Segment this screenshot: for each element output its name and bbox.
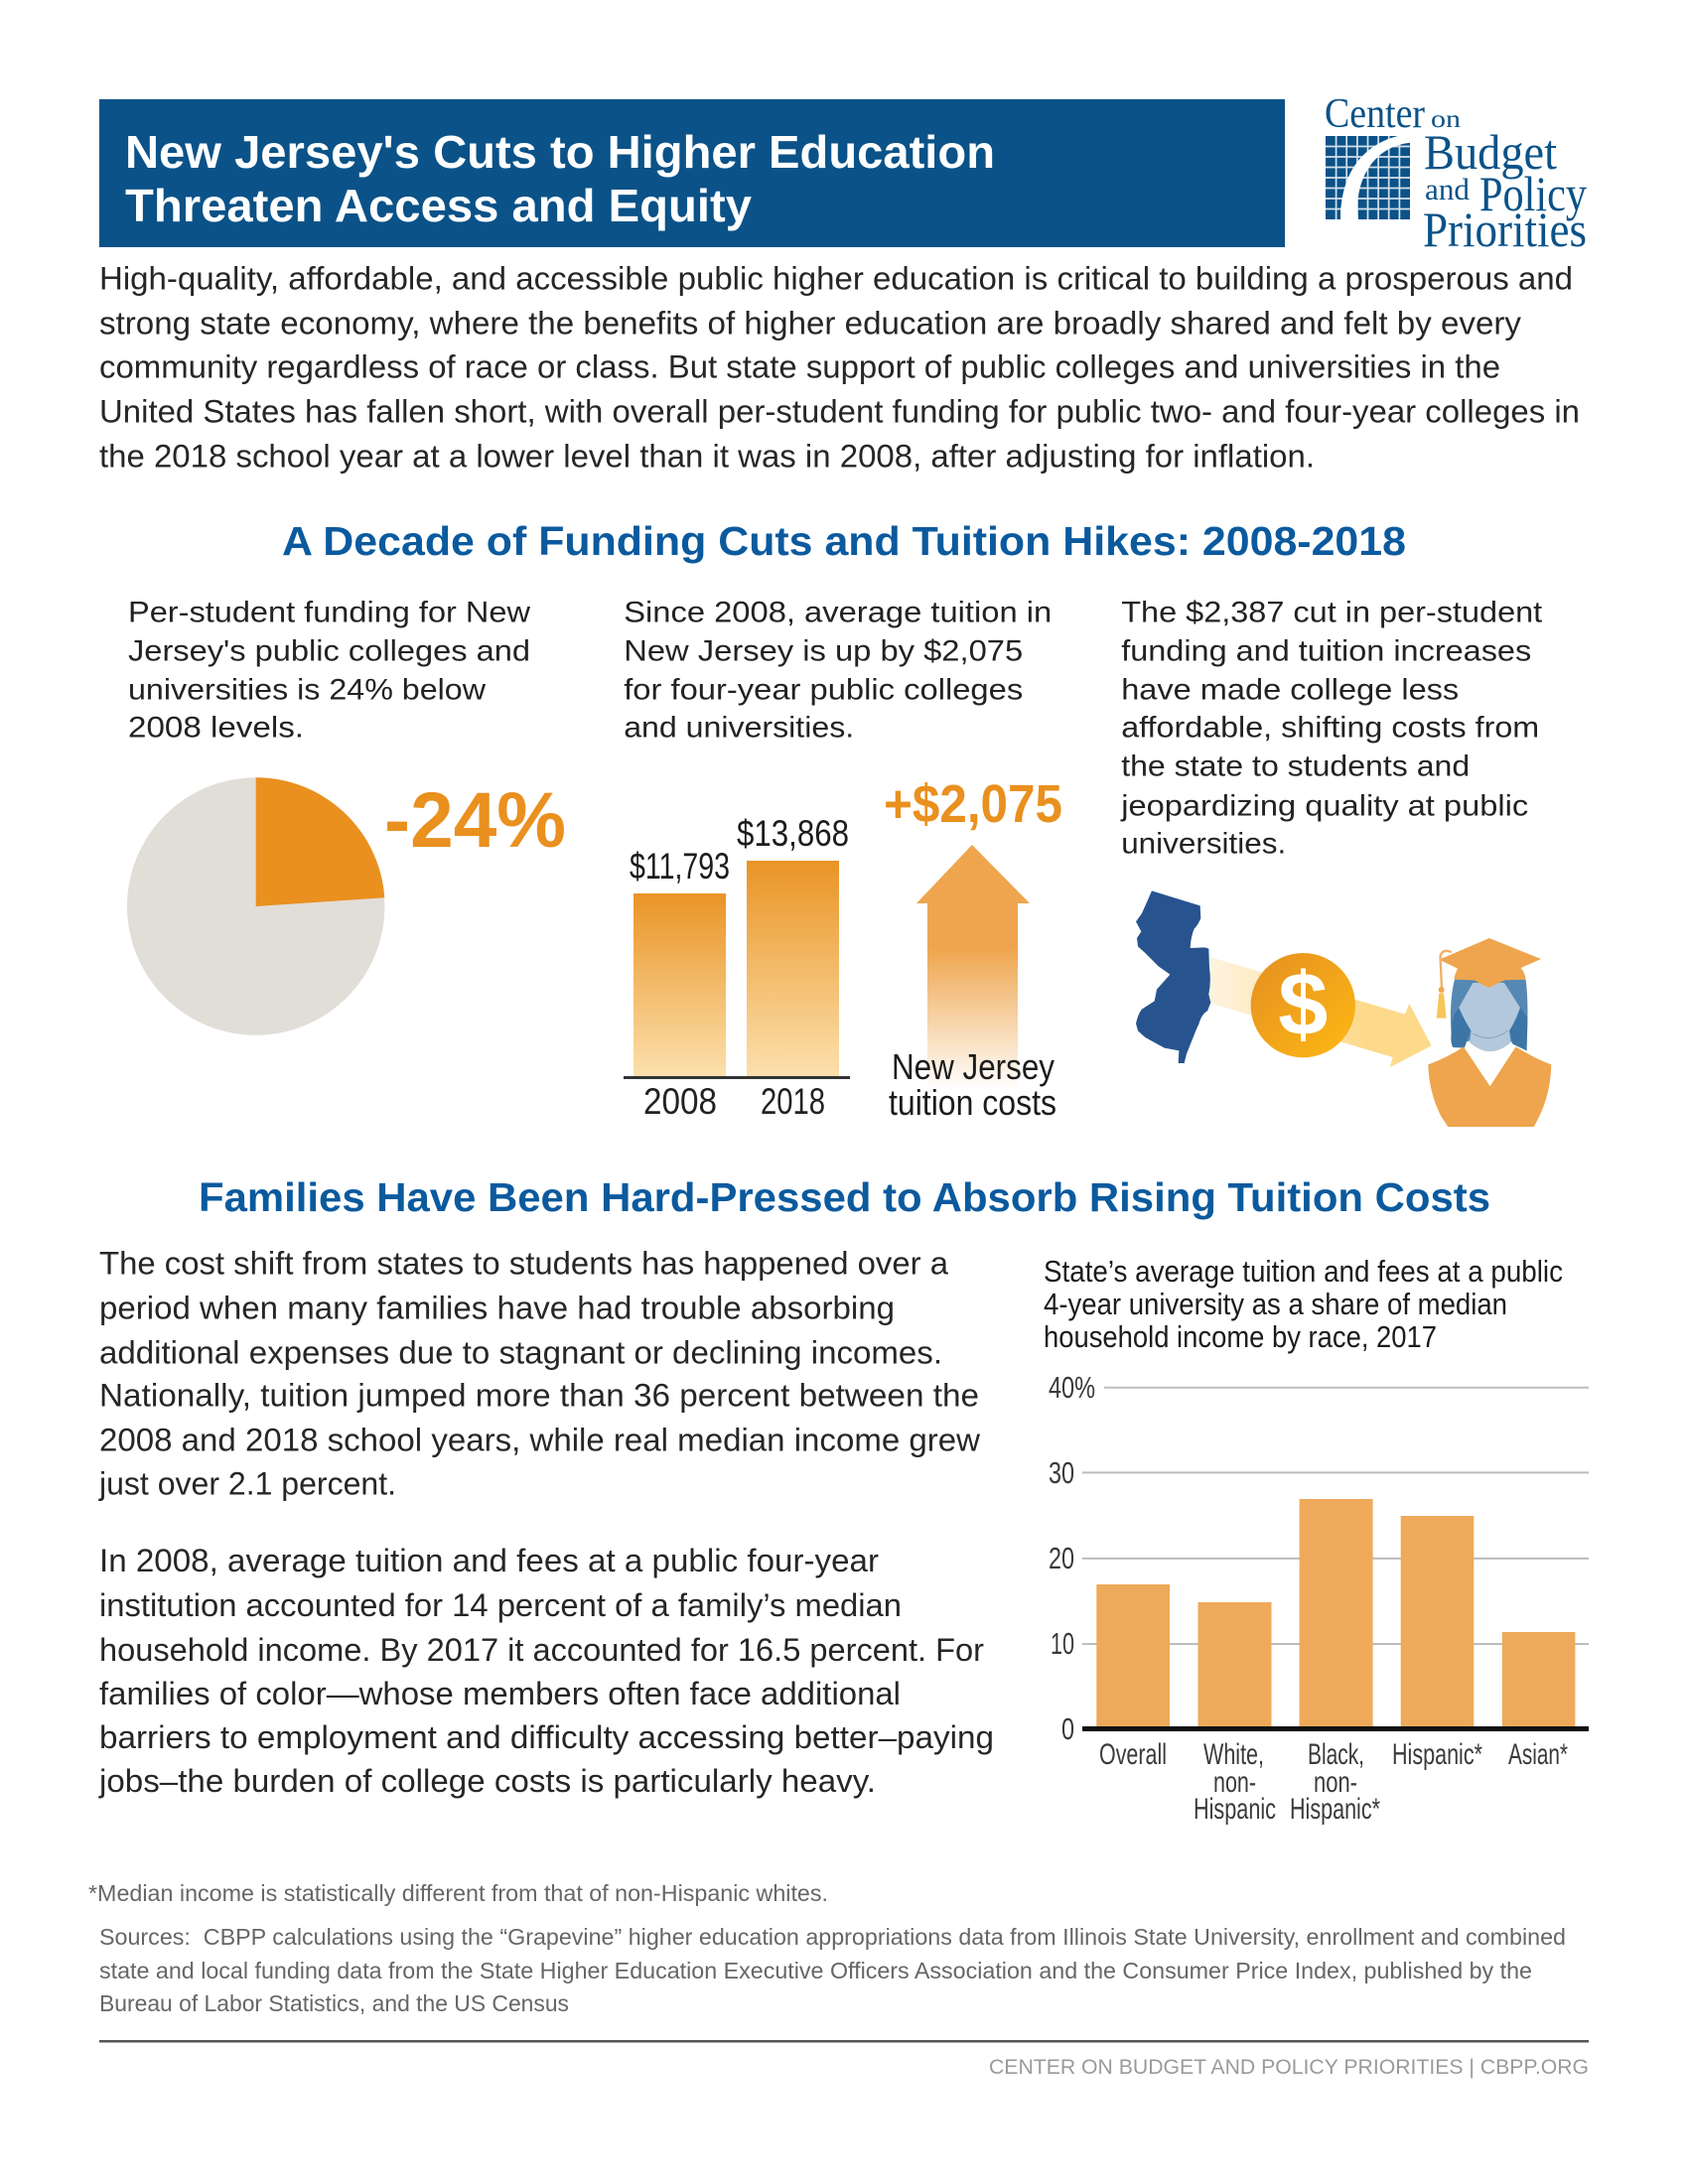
footnote: *Median income is statistically different from that of non-Hispanic whites. [88, 1880, 828, 1906]
y axis labels [1049, 1370, 1095, 1746]
logo: Center on Budget and Policy Priorities [1325, 91, 1587, 257]
sources: Sources: CBPP calculations using the “Grapevine” higher education appropriations data from Illinois State University, enrollment and combined [99, 1924, 1566, 1950]
sources [99, 1924, 1566, 2016]
arrow: plus 2,075 New Jersey tuition costs [884, 774, 1062, 1123]
text block: tuition increase [624, 597, 1052, 745]
x axis labels: non- [1213, 1766, 1256, 1799]
arrow: plus 2,075 New Jersey tuition costs: New Jersey [892, 1046, 1055, 1087]
text block: tuition share paragraph: household income. By 2017 it accounted for 16.5 percent. For [99, 1632, 984, 1668]
x axis labels [1099, 1738, 1568, 1826]
text block: cost shift: have made college less [1121, 674, 1459, 707]
text block: cost shift paragraph: additional expenses due to stagnant or declining incomes. [99, 1334, 942, 1370]
logo: Center on Budget and Policy Priorities: Budget [1424, 124, 1557, 180]
title banner: Threaten Access and Equity [125, 180, 752, 231]
icon: dollar coin: $ [1278, 956, 1328, 1055]
y axis labels: 0 [1061, 1711, 1074, 1746]
y axis labels: 30 [1049, 1455, 1074, 1490]
chart title: 4-year university as a share of median [1044, 1287, 1507, 1321]
pie chart: 24 percent below 2008: -24% [384, 775, 566, 864]
logo: Center on Budget and Policy Priorities: Priorities [1423, 202, 1587, 257]
x axis labels: Hispanic* [1392, 1738, 1482, 1771]
title banner: New Jersey's Cuts to Higher Education [125, 126, 995, 178]
text block: per-student funding [128, 597, 530, 745]
x axis labels: Overall [1099, 1738, 1167, 1771]
text block: tuition share paragraph: In 2008, average tuition and fees at a public four-year [99, 1543, 879, 1578]
text block: cost shift: The $2,387 cut in per-student [1121, 597, 1543, 629]
intro paragraph: strong state economy, where the benefits of higher education are broadly shared and felt by every [99, 306, 1521, 341]
text block: per-student funding: universities is 24% below [128, 674, 486, 707]
text block: tuition increase: and universities. [624, 712, 854, 745]
text block: tuition share paragraph: barriers to employment and difficulty accessing better–paying [99, 1719, 994, 1755]
text block: cost shift: affordable, shifting costs from [1121, 712, 1539, 745]
intro paragraph: community regardless of race or class. But state support of public colleges and universities in the [99, 349, 1500, 385]
illustration: money flows from state to student [1136, 890, 1551, 1127]
heading: A Decade of Funding Cuts and Tuition Hikes: A Decade of Funding Cuts and Tuition Hikes: 2008-2018 [282, 518, 1406, 564]
y axis labels: 40% [1049, 1370, 1095, 1405]
footer credit: CENTER ON BUDGET AND POLICY PRIORITIES | CBPP.ORG [989, 2055, 1589, 2079]
text block: tuition share paragraph: families of color—whose members often face additional [99, 1676, 901, 1711]
sources: state and local funding data from the State Higher Education Executive Officers Association and the Consumer Price Index, published by the [99, 1958, 1532, 1983]
bar chart: tuition 2008 vs 2018: $11,793 [630, 846, 730, 887]
intro paragraph [99, 261, 1580, 475]
text block: cost shift paragraph: just over 2.1 percent. [98, 1465, 396, 1501]
intro paragraph: the 2018 school year at a lower level than it was in 2008, after adjusting for inflation. [99, 439, 1315, 475]
text block: tuition increase: Since 2008, average tuition in [624, 597, 1052, 629]
y axis labels: 20 [1049, 1541, 1074, 1575]
text block: cost shift: funding and tuition increases [1121, 635, 1531, 668]
text block: per-student funding: Per-student funding for New [128, 597, 530, 629]
bar chart: tuition share of median income by race [1044, 1254, 1589, 1826]
text block: cost shift paragraph: The cost shift from states to students has happened over a [99, 1245, 948, 1281]
bar chart: tuition 2008 vs 2018 [624, 813, 850, 1122]
text block: cost shift: jeopardizing quality at public [1120, 790, 1528, 823]
logo: Center on Budget and Policy Priorities: Policy [1479, 166, 1587, 221]
icon: graduate [1428, 938, 1551, 1127]
text block: tuition share paragraph: jobs–the burden of college costs is particularly heavy. [98, 1763, 876, 1799]
text block: cost shift [1120, 597, 1543, 861]
chart title [1044, 1254, 1563, 1354]
x axis labels: non- [1314, 1766, 1357, 1799]
logo: Center on Budget and Policy Priorities: on [1431, 106, 1462, 133]
y axis labels: 10 [1051, 1626, 1074, 1661]
text block: cost shift paragraph [98, 1245, 981, 1501]
bar chart: tuition 2008 vs 2018: $13,868 [737, 813, 849, 854]
intro paragraph: High-quality, affordable, and accessible public higher education is critical to building a prosperous and [99, 261, 1573, 297]
chart title: household income by race, 2017 [1044, 1319, 1437, 1354]
text block: per-student funding: 2008 levels. [128, 712, 304, 745]
logo: Center on Budget and Policy Priorities: and [1425, 172, 1470, 206]
bar chart: tuition 2008 vs 2018: 2008 [643, 1081, 717, 1122]
text block: per-student funding: Jersey's public colleges and [128, 635, 530, 668]
x axis labels: Black, [1308, 1738, 1364, 1771]
text block: tuition increase: for four-year public colleges [624, 674, 1023, 707]
intro paragraph: United States has fallen short, with overall per-student funding for public two- and four-year colleges in [99, 394, 1580, 430]
arrow: plus 2,075 New Jersey tuition costs: tuition costs [889, 1082, 1056, 1123]
bars [1096, 1499, 1575, 1728]
icon: New Jersey map [1136, 890, 1210, 1063]
text block: tuition share paragraph [98, 1543, 994, 1799]
pie chart: 24 percent below 2008 [127, 775, 566, 1035]
x axis labels: White, [1203, 1738, 1264, 1771]
x axis labels: Hispanic* [1290, 1793, 1380, 1826]
text block: cost shift paragraph: period when many families have had trouble absorbing [99, 1290, 895, 1325]
heading: Families Have Been Hard-Pressed: Families Have Been Hard-Pressed to Absorb Rising Tuition Costs [199, 1174, 1490, 1220]
text block: cost shift: the state to students and [1121, 751, 1470, 783]
text block: cost shift paragraph: Nationally, tuition jumped more than 36 percent between the [99, 1377, 979, 1413]
text block: cost shift: universities. [1121, 828, 1286, 861]
x axis labels: Asian* [1508, 1738, 1568, 1771]
title banner [99, 99, 1285, 247]
text block: tuition increase: New Jersey is up by $2,075 [624, 635, 1023, 668]
chart title: State’s average tuition and fees at a public [1044, 1254, 1563, 1289]
text block: cost shift paragraph: 2008 and 2018 school years, while real median income grew [99, 1422, 981, 1457]
icon: flow arrow [1208, 957, 1432, 1067]
text block: tuition share paragraph: institution accounted for 14 percent of a family’s median [99, 1587, 902, 1623]
sources: Bureau of Labor Statistics, and the US Census [99, 1990, 569, 2016]
arrow: plus 2,075 New Jersey tuition costs: +$2,075 [884, 774, 1062, 834]
bar chart: tuition 2008 vs 2018: 2018 [761, 1081, 825, 1122]
icon: dollar coin [1251, 953, 1355, 1057]
logo: Center on Budget and Policy Priorities: Center [1325, 91, 1425, 137]
x axis labels: Hispanic [1194, 1793, 1276, 1826]
